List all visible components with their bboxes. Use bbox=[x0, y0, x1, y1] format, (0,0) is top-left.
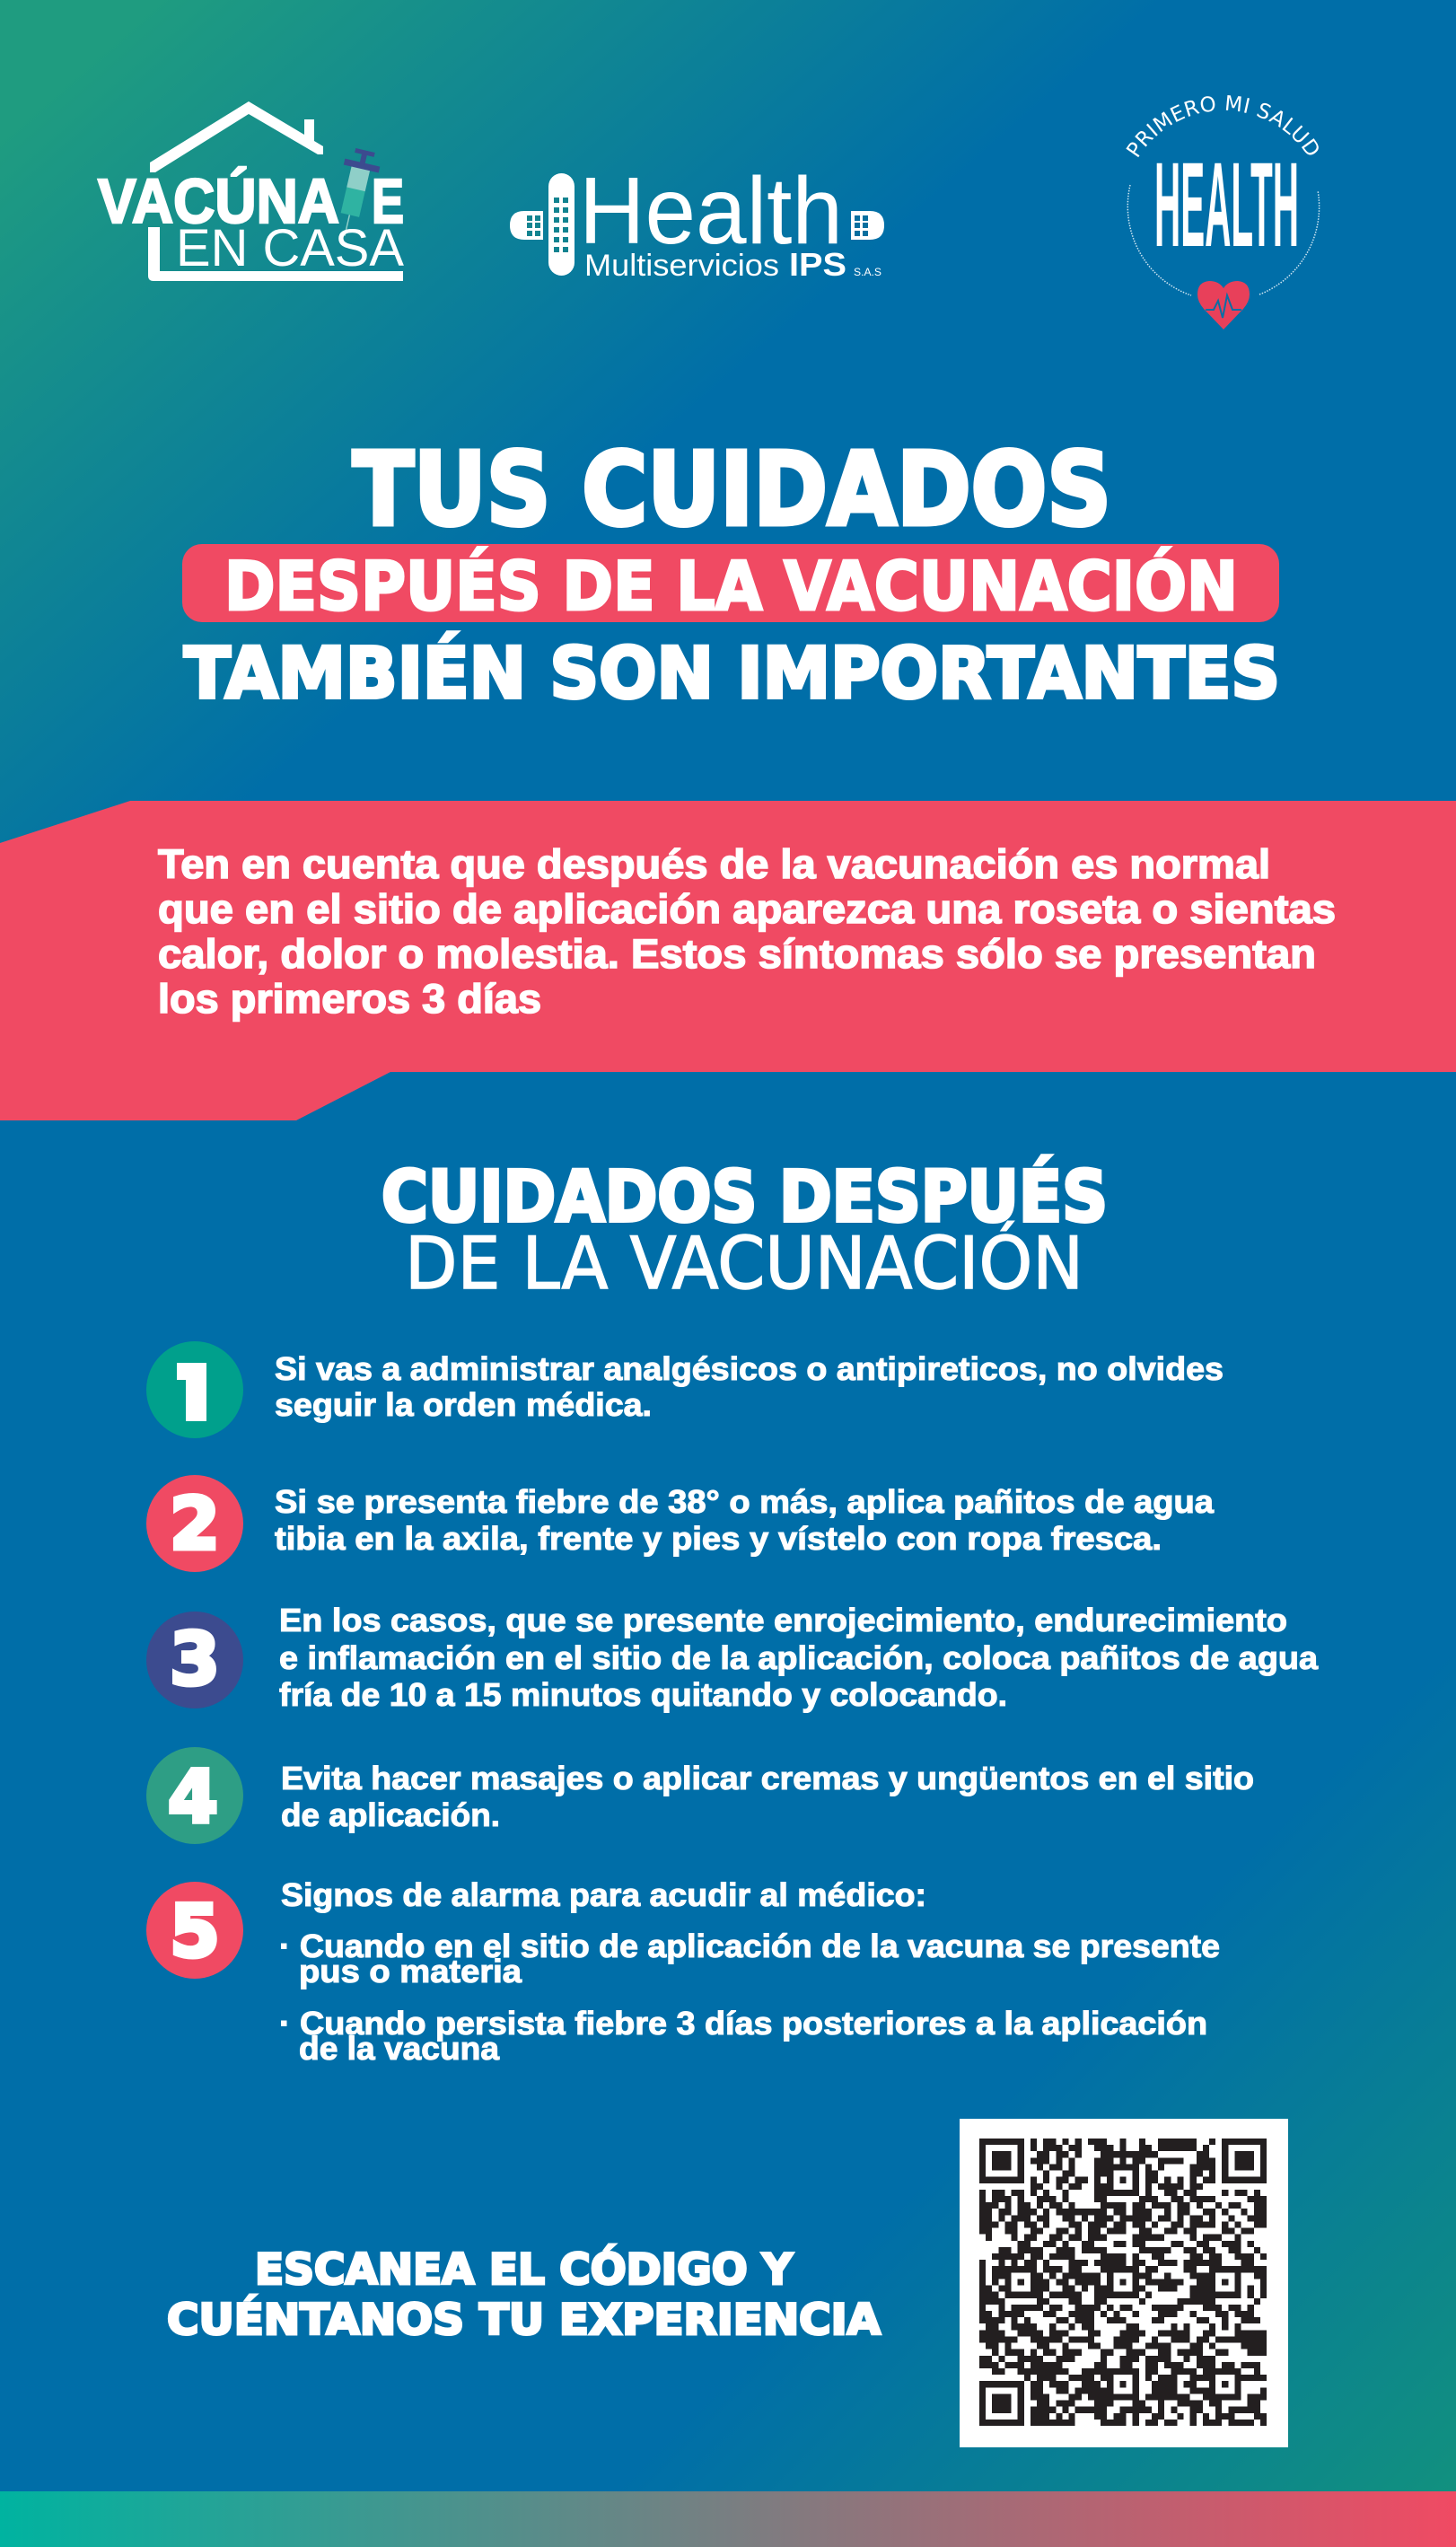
wordmark: IPS: IPS bbox=[789, 246, 846, 283]
icon: syringe bbox=[328, 146, 382, 240]
badge 3: 3 bbox=[170, 1618, 220, 1701]
bottom gradient strip bbox=[0, 2491, 1456, 2547]
notice text: Ten en cuenta que después de la vacunación es normal bbox=[158, 841, 1270, 887]
section heading bbox=[382, 1155, 1108, 1305]
badge 1 bbox=[146, 1341, 243, 1441]
badge 4: 4 bbox=[168, 1755, 218, 1839]
badge 2: 2 bbox=[170, 1482, 220, 1566]
call to action bbox=[167, 2245, 881, 2345]
badge 5 bbox=[146, 1882, 243, 1979]
logo: Primero mi salud Health bbox=[1126, 95, 1320, 329]
notice text: que en el sitio de aplicación aparezca una roseta o sientas bbox=[158, 886, 1336, 932]
item 2 text: Si se presenta fiebre de 38° o más, aplica pañitos de agua bbox=[275, 1483, 1215, 1520]
item 5 text: pus o materia bbox=[299, 1953, 522, 1989]
badge 3 bbox=[146, 1612, 243, 1708]
title line 1: TUS CUIDADOS bbox=[353, 432, 1111, 549]
icon: heart with pulse bbox=[1197, 281, 1250, 329]
title bbox=[182, 432, 1280, 715]
badge 1: 1 bbox=[166, 1345, 224, 1441]
logo: Vacúnate en casa bbox=[98, 101, 404, 281]
call to action: CUÉNTANOS TU EXPERIENCIA bbox=[167, 2296, 881, 2345]
title line 2: DESPUÉS DE LA VACUNACIÓN bbox=[224, 547, 1238, 626]
notice text: calor, dolor o molestia. Estos síntomas sólo se presentan bbox=[158, 931, 1316, 977]
icon: bandage bbox=[510, 173, 884, 276]
wordmark: E: E bbox=[372, 166, 404, 236]
item 2 bbox=[146, 1475, 1215, 1572]
item 4 text bbox=[281, 1760, 1254, 1833]
wordmark: Multiservicios: Multiservicios bbox=[584, 249, 779, 283]
badge 2 bbox=[146, 1475, 243, 1572]
item 1 text: Si vas a administrar analgésicos o antipireticos, no olvides bbox=[275, 1350, 1224, 1387]
QR code bbox=[960, 2119, 1288, 2447]
item 5 text: · Cuando persista fiebre 3 días posteriores a la aplicación bbox=[279, 2005, 1207, 2042]
roof shape bbox=[150, 101, 323, 172]
section heading: DE LA VACUNACIÓN bbox=[405, 1221, 1083, 1305]
item 5 text: Signos de alarma para acudir al médico: bbox=[281, 1876, 926, 1913]
call to action: ESCANEA EL CÓDIGO Y bbox=[255, 2245, 794, 2295]
notice text bbox=[158, 841, 1336, 1022]
notice text: los primeros 3 días bbox=[158, 976, 541, 1022]
highlight pill bbox=[182, 544, 1279, 622]
item 5 text: · Cuando en el sitio de aplicación de la vacuna se presente bbox=[279, 1928, 1220, 1964]
item 1 text: seguir la orden médica. bbox=[275, 1386, 652, 1423]
panel: pink notice banner bbox=[0, 801, 1456, 1120]
item 2 text: tibia en la axila, frente y pies y vístelo con ropa fresca. bbox=[275, 1520, 1162, 1557]
item 4 text: de aplicación. bbox=[281, 1796, 500, 1833]
wordmark: EN CASA: EN CASA bbox=[176, 219, 404, 277]
item 5 text bbox=[279, 1876, 1220, 2067]
badge 4 bbox=[146, 1747, 243, 1844]
item 3 text: e inflamación en el sitio de la aplicación, coloca pañitos de agua bbox=[279, 1639, 1319, 1676]
title line 3: TAMBIÉN SON IMPORTANTES bbox=[184, 632, 1280, 715]
item 4 text: Evita hacer masajes o aplicar cremas y ungüentos en el sitio bbox=[281, 1760, 1254, 1796]
dotted circle bbox=[1127, 185, 1320, 295]
item 1 bbox=[146, 1341, 1224, 1441]
item 5 bbox=[146, 1876, 1220, 2067]
wordmark: VACÚNA: VACÚNA bbox=[98, 166, 339, 236]
wordmark: Health: Health bbox=[579, 158, 843, 264]
item 1 text bbox=[275, 1350, 1224, 1423]
item 3 text: fría de 10 a 15 minutos quitando y colocando. bbox=[279, 1676, 1007, 1713]
wordmark: S.A.S: S.A.S bbox=[854, 266, 881, 278]
arc text: PRIMERO MI SALUD bbox=[1126, 95, 1319, 158]
logo: Health Multiservicios IPS bbox=[510, 158, 884, 283]
item 3 text bbox=[279, 1602, 1319, 1713]
item 3 text: En los casos, que se presente enrojecimiento, endurecimiento bbox=[279, 1602, 1287, 1638]
item 5 text: de la vacuna bbox=[299, 2030, 500, 2067]
badge 5: 5 bbox=[170, 1890, 220, 1973]
item 3 bbox=[146, 1602, 1319, 1713]
section heading: CUIDADOS DESPUÉS bbox=[382, 1155, 1108, 1238]
floor frame bbox=[148, 227, 403, 281]
item 2 text bbox=[275, 1483, 1215, 1557]
item 4 bbox=[146, 1747, 1254, 1844]
